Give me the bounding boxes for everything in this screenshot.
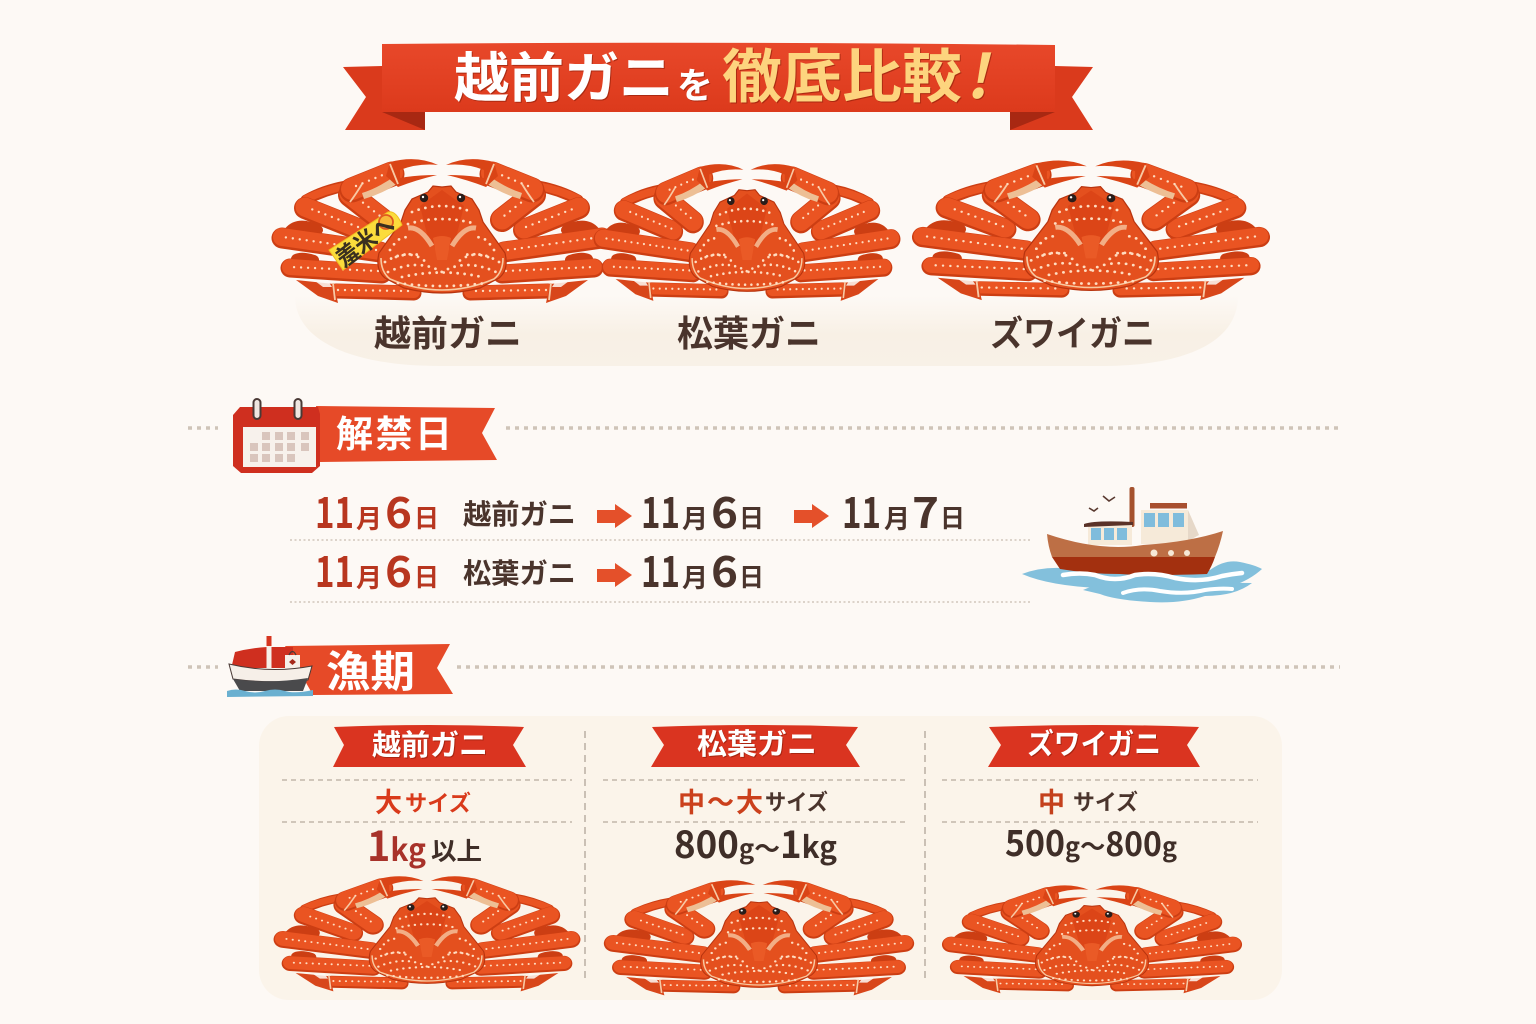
size grade: 中～大: [678, 781, 763, 820]
row 1: 月: [356, 499, 382, 536]
row 1: [315, 480, 965, 541]
row 1: 11: [641, 480, 680, 541]
crab: ズワイガニ: [923, 161, 1259, 300]
size grade: サイズ: [1073, 785, 1138, 817]
column: ズワイガニ: [951, 721, 1233, 993]
size grade: 大: [375, 781, 402, 820]
row 1: 日: [414, 499, 439, 535]
title text: [454, 30, 1003, 116]
crab: 越前ガニ: [282, 159, 602, 303]
title text: 越前ガニ: [454, 34, 674, 113]
date table: [290, 480, 1030, 602]
row 2: 6: [385, 539, 412, 600]
section heading: 解禁日: [233, 399, 497, 473]
row 1: 6: [711, 480, 738, 541]
row 2: 6: [711, 539, 738, 600]
size grade: サイズ: [405, 786, 471, 818]
panel: crab comparison platter: [295, 296, 1238, 366]
row 1: 越前ガニ: [463, 493, 576, 533]
weight: [367, 813, 482, 873]
title text: !: [962, 30, 1003, 116]
row 2: 11: [641, 539, 680, 600]
weight: 500g～800g: [1005, 816, 1177, 867]
icon: calendar: [233, 399, 320, 473]
row 1: 7: [912, 480, 939, 541]
heading text: 解禁日: [336, 404, 452, 458]
size grade: [1038, 781, 1138, 820]
crab name labels: 松葉ガニ: [677, 305, 821, 357]
size grade: [678, 781, 828, 820]
weight: 1kg: [367, 813, 426, 873]
ribbon label: 松葉ガニ: [697, 721, 817, 763]
ribbon label: [333, 722, 526, 767]
ribbon label: [651, 721, 860, 767]
column: 越前ガニ: [283, 722, 571, 991]
row 1: 11: [315, 480, 354, 541]
icon: small boat: [227, 636, 313, 697]
crab name labels: 越前ガニ: [374, 305, 522, 357]
weight: 以上: [431, 832, 482, 868]
row 2: [315, 539, 764, 600]
column: 松葉ガニ: [613, 721, 905, 995]
panel: size comparison: [259, 716, 1282, 1000]
title banner: [343, 30, 1093, 130]
ribbon label: ズワイガニ: [1027, 721, 1161, 763]
ribbon label: [988, 721, 1200, 767]
size grade: サイズ: [765, 785, 828, 817]
title text: 徹底比較: [722, 30, 962, 114]
row 1: 日: [940, 499, 965, 535]
row 2: 月: [682, 558, 708, 595]
crab: 松葉ガニ: [603, 164, 891, 301]
row 1: 月: [884, 499, 910, 536]
size grade: 中: [1038, 781, 1065, 820]
title text: を: [677, 57, 713, 109]
row 2: 日: [739, 558, 764, 594]
crab illustration: [951, 885, 1233, 993]
crab illustration: [613, 880, 905, 995]
row 1: 11: [842, 480, 881, 541]
row 2: 月: [356, 558, 382, 595]
row 2: 日: [414, 558, 439, 594]
weight: 800g～1kg: [674, 815, 837, 869]
crab illustration: [283, 876, 571, 991]
crab name labels: ズワイガニ: [990, 306, 1155, 357]
crab name labels: [374, 305, 1155, 357]
size grade: [375, 781, 471, 820]
row 1: 6: [385, 480, 412, 541]
yellow tag on crab: 羞米へ: [327, 206, 401, 274]
icon: fishing boat: [1022, 487, 1262, 602]
row 1: 月: [682, 499, 708, 536]
row 2: 松葉ガニ: [463, 552, 576, 592]
row 1: 日: [739, 499, 764, 535]
heading text: 漁期: [326, 638, 415, 700]
row 2: 11: [315, 539, 354, 600]
ribbon label: 越前ガニ: [372, 722, 488, 764]
section heading: 漁期: [227, 636, 453, 700]
